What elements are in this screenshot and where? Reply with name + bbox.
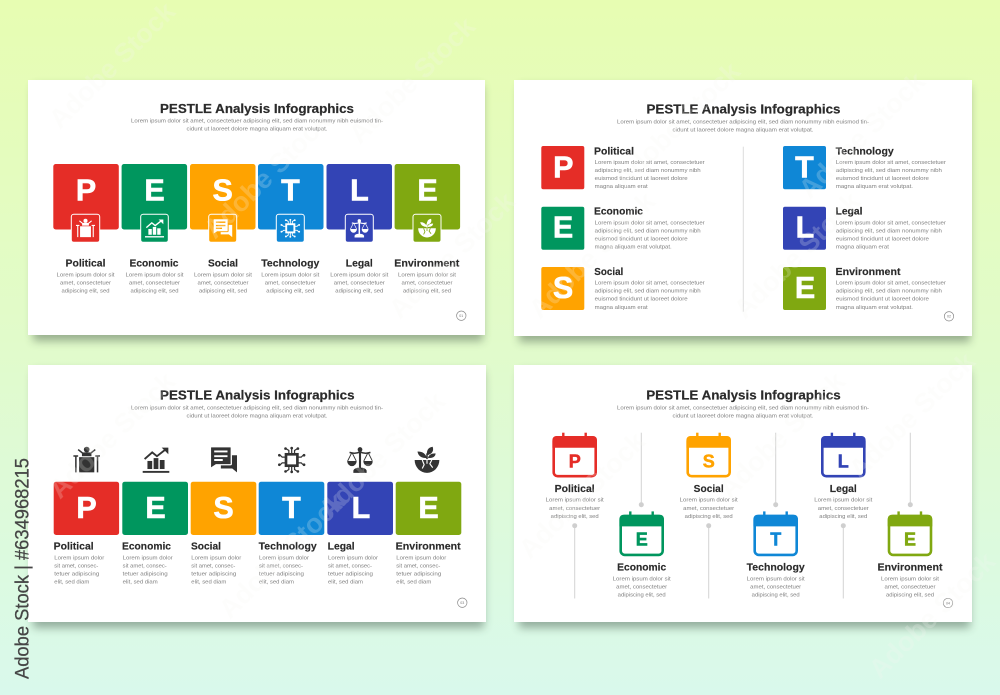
text block: Technology: tetuer adipiscing (259, 571, 304, 577)
subtitle: Lorem ipsum dolor sit amet, consectetuer adipiscing elit, sed diam nonummy nibh euismod tin- (617, 119, 869, 125)
item: Environment: Environment (836, 267, 901, 278)
item: Economic: euismod tincidunt ut laoreet dolore (595, 236, 688, 242)
calendar item: Environment (878, 511, 943, 598)
tile: T (258, 164, 324, 230)
tile: E: E (145, 491, 166, 525)
text block: Legal: Lorem ipsum dolor (328, 555, 378, 561)
item: Technology: Technology (836, 146, 894, 157)
text block: Economic: Economic (130, 259, 179, 270)
text block: Legal: tetuer adipiscing (328, 571, 373, 577)
tile: T (259, 482, 324, 535)
text: Adobe Stock (43, 0, 182, 134)
item: Social: magna aliquam erat (595, 305, 648, 311)
calendar item: Technology: Lorem ipsum dolor sit (747, 576, 805, 582)
item: Social: S (553, 271, 573, 305)
text block: Political: sit amet, consec- (54, 563, 98, 569)
text block: Environment: amet, consectetuer (402, 281, 453, 287)
text block: Environment: elit, sed diam (396, 579, 432, 585)
calendar item: Political: amet, consectetuer (549, 506, 600, 512)
calendar item: Legal: L (838, 451, 849, 471)
text: Adobe Stock (313, 386, 452, 524)
tile: S: S (213, 174, 233, 208)
divider (743, 147, 744, 312)
page number 02: 02 (947, 315, 951, 319)
text block: Legal: sit amet, consec- (328, 563, 372, 569)
text block: Political: Political (66, 259, 106, 270)
item: Political: euismod tincidunt ut laoreet dolore (595, 176, 688, 182)
text block: Environment: sit amet, consec- (396, 563, 440, 569)
calendar item: Environment: amet, consectetuer (884, 584, 936, 590)
tile: E (122, 164, 187, 230)
calendar item: Technology: amet, consectetuer (750, 584, 801, 590)
text block: Social: tetuer adipiscing (191, 571, 236, 577)
text block: Technology: Technology (259, 542, 317, 553)
item: Economic (541, 206, 705, 250)
tile: S (191, 482, 256, 535)
icon badge: social speech bubbles (209, 214, 237, 242)
calendar item: Political: P (569, 451, 581, 471)
icon: speech bubbles (210, 447, 237, 472)
text block: Social: Social (208, 259, 238, 270)
item: Economic: E (553, 210, 573, 244)
item: Technology: Lorem ipsum dolor sit amet, consectetuer (836, 160, 946, 166)
text block: Technology: sit amet, consec- (259, 563, 303, 569)
text block: Legal (330, 259, 389, 295)
text block: Economic: Economic (122, 542, 171, 553)
tile: E (395, 164, 460, 230)
text block: Social: adipiscing elit, sed (199, 289, 247, 295)
page number 04 (943, 598, 953, 608)
text block: Political: Lorem ipsum dolor sit (56, 273, 115, 279)
item: Environment: adipiscing elit, sed diam nonummy nibh (836, 289, 942, 295)
calendar item: Technology: adipiscing elit, sed (752, 592, 800, 598)
text block: Legal: amet, consectetuer (334, 281, 385, 287)
calendar item: Legal: adipiscing elit, sed (819, 514, 867, 520)
icon: chip (278, 447, 305, 473)
subtitle: cidunt ut laoreet dolore magna aliquam erat volutpat. (186, 127, 328, 133)
calendar item: Political: Political (555, 484, 595, 495)
text block: Economic: elit, sed diam (123, 579, 158, 585)
timeline connector 6 (908, 433, 913, 507)
text block: Economic: sit amet, consec- (123, 563, 167, 569)
subtitle (617, 119, 869, 133)
item: Technology: magna aliquam erat volutpat. (836, 184, 913, 190)
calendar item: Technology (747, 511, 805, 598)
item: Political (541, 146, 705, 190)
calendar item: Political (546, 433, 604, 520)
tile: P (53, 164, 119, 230)
tile: L (327, 482, 393, 535)
title: PESTLE Analysis Infographics (646, 388, 841, 403)
title: PESTLE Analysis Infographics (160, 387, 355, 402)
calendar item: Economic: E (636, 529, 648, 549)
icon: plant (415, 447, 439, 473)
tile: P: P (76, 491, 97, 525)
subtitle: cidunt ut laoreet dolore magna aliquam erat volutpat. (186, 413, 328, 419)
item: Economic: Lorem ipsum dolor sit amet, consectetuer (595, 220, 705, 226)
item: Political: P (553, 150, 573, 184)
tile: T: T (281, 174, 300, 208)
calendar item: Technology: Technology (747, 562, 805, 573)
item: Economic: magna aliquam erat volutpat. (595, 244, 672, 250)
text block: Social: elit, sed diam (191, 579, 227, 585)
text block: Economic: Lorem ipsum dolor sit (126, 273, 184, 279)
icon: scales (347, 447, 373, 473)
item: Social (541, 267, 705, 311)
text: Adobe Stock (43, 366, 182, 504)
text block: Environment: adipiscing elit, sed (403, 289, 451, 295)
subtitle: Lorem ipsum dolor sit amet, consectetuer adipiscing elit, sed diam nonummy nibh euismod tin- (131, 405, 383, 411)
text block: Environment (396, 542, 461, 585)
item: Social: euismod tincidunt ut laoreet dolore (595, 297, 688, 303)
icon badge: legal scales (345, 214, 373, 242)
text block: Environment: Lorem ipsum dolor sit (398, 273, 456, 279)
item: Social: Social (594, 267, 624, 278)
text: Adobe Stock (383, 186, 522, 324)
text block: Technology (261, 259, 320, 295)
calendar item: Political: Lorem ipsum dolor sit (546, 498, 604, 504)
panel: slide 4, calendar timeline (514, 365, 972, 622)
item: Social: Lorem ipsum dolor sit amet, consectetuer (595, 281, 705, 287)
text block: Environment (394, 259, 460, 295)
calendar item: Economic: Lorem ipsum dolor sit (613, 576, 671, 582)
text: Adobe Stock (713, 366, 852, 504)
icon badge: environment plant (413, 214, 441, 242)
item: Environment: magna aliquam erat volutpat. (836, 305, 913, 311)
text block: Technology: amet, consectetuer (265, 281, 316, 287)
calendar item: Legal: Lorem ipsum dolor sit (814, 498, 873, 504)
item: Technology: euismod tincidunt ut laoreet dolore (836, 176, 929, 182)
tile: E: E (418, 491, 439, 525)
item: Social: adipiscing elit, sed diam nonummy nibh (595, 289, 701, 295)
text block: Technology: adipiscing elit, sed (266, 289, 314, 295)
subtitle: Lorem ipsum dolor sit amet, consectetuer adipiscing elit, sed diam nonummy nibh euismod tin- (617, 406, 869, 412)
subtitle: cidunt ut laoreet dolore magna aliquam erat volutpat. (672, 414, 814, 420)
tile: L (326, 164, 392, 230)
text block: Political (54, 542, 104, 585)
text block: Social: Lorem ipsum dolor sit (194, 273, 252, 279)
calendar item: Social (680, 433, 738, 520)
text block: Technology: Technology (261, 259, 320, 270)
calendar item: Social: Social (694, 484, 724, 495)
subtitle (617, 406, 869, 420)
calendar item: Legal: Legal (830, 484, 857, 495)
tile: L: L (352, 491, 370, 525)
text block: Political: Political (54, 542, 94, 553)
item: Technology (783, 146, 946, 190)
icon badge: political podium (71, 214, 100, 242)
calendar item: Social: adipiscing elit, sed (685, 514, 733, 520)
item: Legal: adipiscing elit, sed diam nonummy nibh (836, 228, 942, 234)
tile: P (54, 482, 119, 535)
item: Legal: euismod tincidunt ut laoreet dolore (836, 236, 929, 242)
text block: Technology (259, 542, 317, 585)
text block: Social: Social (191, 542, 221, 553)
panel: slide 3, icons above tiles (28, 365, 486, 622)
icon badge: economic chart (141, 214, 168, 242)
text block: Political: tetuer adipiscing (54, 571, 99, 577)
title: PESTLE Analysis Infographics (646, 101, 840, 116)
text block: Economic (126, 259, 184, 295)
page number 04: 04 (946, 601, 950, 605)
subtitle: cidunt ut laoreet dolore magna aliquam erat volutpat. (672, 127, 814, 133)
tile: S: S (213, 491, 234, 525)
text block: Economic: Lorem ipsum dolor (123, 555, 173, 561)
text block: Environment: Environment (394, 259, 460, 270)
item: Economic: Economic (594, 206, 643, 218)
calendar item: Environment: Lorem ipsum dolor sit (881, 576, 939, 582)
text block: Technology: Lorem ipsum dolor (259, 555, 309, 561)
text: Adobe Stock (343, 11, 482, 149)
calendar item: Social: Lorem ipsum dolor sit (680, 498, 738, 504)
page number 02 (944, 312, 954, 321)
text: Adobe Stock (843, 346, 982, 484)
text: Adobe Stock (793, 66, 932, 204)
calendar item: Technology: T (770, 529, 781, 549)
text block: Social (191, 542, 241, 585)
title: PESTLE Analysis Infographics (160, 101, 354, 116)
text block: Legal: Lorem ipsum dolor sit (330, 273, 389, 279)
item: Environment (783, 267, 946, 311)
subtitle (131, 405, 383, 419)
text: Adobe Stock (863, 546, 1000, 684)
text: Adobe Stock (513, 426, 652, 564)
text block: Political: Lorem ipsum dolor (54, 555, 104, 561)
item: Political: magna aliquam erat (595, 184, 648, 190)
text block: Political: adipiscing elit, sed (62, 289, 110, 295)
text: Adobe Stock (523, 186, 662, 324)
item: Environment: E (795, 271, 815, 305)
icon: podium (73, 447, 100, 472)
calendar item: Environment: adipiscing elit, sed (886, 592, 934, 598)
tile: L: L (350, 174, 369, 208)
text block: Environment: Environment (396, 542, 461, 553)
calendar item: Economic: adipiscing elit, sed (618, 592, 666, 598)
calendar item: Economic: Economic (617, 562, 667, 573)
calendar item: Economic: amet, consectetuer (616, 584, 667, 590)
text block: Social: amet, consectetuer (198, 281, 249, 287)
item: Legal (783, 206, 946, 250)
page number 01: 01 (459, 314, 463, 318)
tile: E (122, 482, 188, 535)
calendar item: Environment: E (904, 529, 916, 549)
text block: Social: Lorem ipsum dolor (191, 555, 241, 561)
subtitle (131, 119, 383, 133)
text block: Political: elit, sed diam (54, 579, 90, 585)
item: Political: Political (594, 146, 634, 157)
text: Adobe Stock (198, 106, 337, 244)
timeline connector 2 (639, 433, 644, 507)
timeline connector 3 (706, 523, 711, 598)
text block: Economic (122, 542, 173, 585)
item: Economic: adipiscing elit, sed diam nonummy nibh (595, 228, 701, 234)
text block: Economic: amet, consectetuer (129, 281, 180, 287)
calendar item: Environment: Environment (878, 562, 943, 573)
text block: Legal: Legal (346, 259, 373, 270)
subtitle: Lorem ipsum dolor sit amet, consectetuer adipiscing elit, sed diam nonummy nibh euismod tin- (131, 119, 383, 125)
timeline connector 4 (773, 433, 778, 507)
item: Legal: L (796, 210, 814, 244)
text block: Technology: elit, sed diam (259, 579, 294, 585)
text block: Political (56, 259, 115, 295)
text: Adobe Stock (728, 186, 867, 324)
tile: T: T (282, 491, 301, 525)
text block: Legal (328, 542, 378, 585)
item: Political: adipiscing elit, sed diam nonummy nibh (595, 168, 701, 174)
calendar item: Legal: amet, consectetuer (818, 506, 869, 512)
text: Adobe Stock (213, 486, 352, 624)
calendar item: Social: S (703, 451, 715, 471)
icon badge: technology chip (276, 214, 304, 242)
timeline connector 1 (572, 523, 577, 598)
page number 03: 03 (460, 601, 464, 605)
calendar item: Legal (814, 433, 873, 520)
page number 01 (457, 311, 466, 320)
panel: slide 1, PESTLE tiles with icon badges (28, 80, 485, 335)
item: Legal: Lorem ipsum dolor sit amet, consectetuer (836, 220, 946, 226)
calendar item: Political: adipiscing elit, sed (551, 514, 599, 520)
item: Environment: euismod tincidunt ut laoreet dolore (836, 297, 929, 303)
item: Technology: T (795, 150, 814, 184)
tile: E (396, 482, 461, 535)
item: Legal: magna aliquam erat (836, 244, 889, 250)
tile: P: P (76, 174, 96, 208)
calendar item: Economic (613, 511, 671, 598)
text block: Legal: elit, sed diam (328, 579, 363, 585)
panel: slide 2, two-column list (514, 80, 972, 336)
text block: Social (194, 259, 252, 295)
text block: Economic: adipiscing elit, sed (130, 289, 178, 295)
text block: Economic: tetuer adipiscing (123, 571, 168, 577)
text block: Legal: Legal (328, 542, 355, 553)
text: Adobe Stock (608, 56, 747, 194)
item: Legal: Legal (836, 206, 863, 218)
icon: growth chart (143, 448, 169, 473)
text block: Political: amet, consectetuer (60, 281, 111, 287)
calendar item: Social: amet, consectetuer (683, 506, 734, 512)
item: Political: Lorem ipsum dolor sit amet, consectetuer (595, 160, 705, 166)
text block: Legal: adipiscing elit, sed (335, 289, 383, 295)
text block: Environment: Lorem ipsum dolor (396, 555, 446, 561)
tile: S (190, 164, 256, 230)
item: Environment: Lorem ipsum dolor sit amet, consectetuer (836, 281, 946, 287)
tile: E: E (417, 174, 438, 208)
text block: Technology: Lorem ipsum dolor sit (261, 273, 320, 279)
tile: E: E (144, 174, 165, 208)
stock id text: Adobe Stock | #634968215 (12, 458, 34, 679)
page number 03 (458, 598, 467, 607)
text block: Environment: tetuer adipiscing (396, 571, 441, 577)
text block: Social: sit amet, consec- (191, 563, 235, 569)
item: Technology: adipiscing elit, sed diam nonummy nibh (836, 168, 942, 174)
timeline connector 5 (841, 523, 846, 598)
